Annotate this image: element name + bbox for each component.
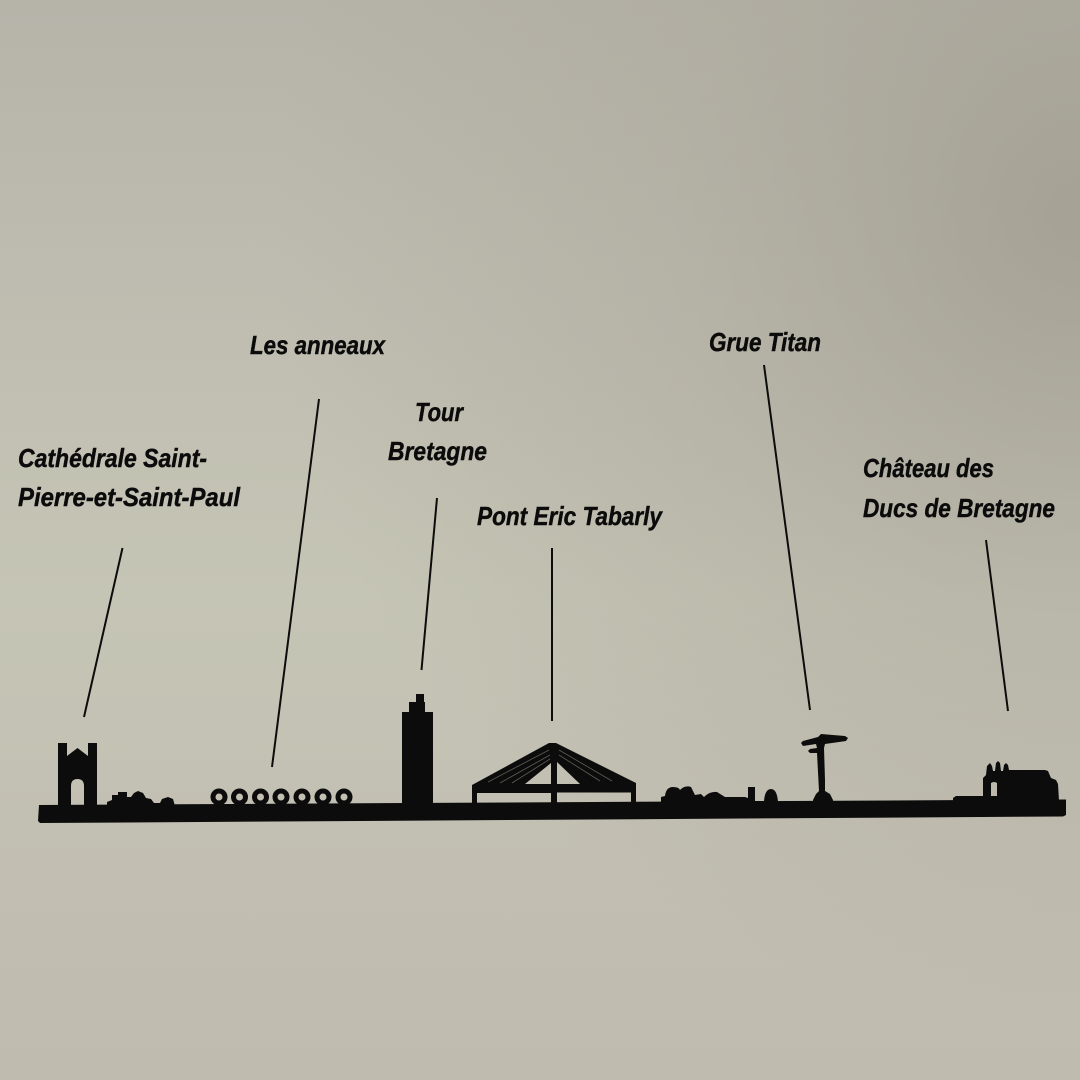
icon: château des Ducs de Bretagne [953, 761, 1059, 802]
icon: cathédrale Saint-Pierre-et-Saint-Paul [58, 743, 97, 806]
leader line: cathédrale [84, 548, 122, 717]
icon: tour Bretagne [402, 694, 433, 806]
label: château: Château des [863, 453, 994, 483]
label: grue Titan: Grue Titan [709, 327, 821, 357]
base bar [38, 800, 1066, 823]
label: château: Ducs de Bretagne [863, 493, 1055, 523]
icon: petits bâtiments gauche [107, 791, 175, 806]
icon: haubans du pont [488, 750, 612, 783]
label: cathédrale: Cathédrale Saint- [18, 443, 207, 473]
skyline silhouette [38, 694, 1066, 823]
label: les anneaux: Les anneaux [250, 330, 386, 360]
leader line: les anneaux [272, 399, 319, 767]
leader line: pont Eric Tabarly [551, 548, 553, 721]
label: cathédrale [18, 443, 241, 512]
leader line: château [986, 540, 1008, 711]
icon: grue Titan [801, 734, 848, 804]
leader line: tour Bretagne [422, 498, 437, 670]
leader line: grue Titan [764, 365, 810, 710]
label: tour Bretagne: Tour [415, 397, 465, 427]
label: pont Eric Tabarly: Pont Eric Tabarly [477, 501, 663, 531]
icon: pont Eric Tabarly [472, 743, 636, 804]
icon: bâtiments centre [661, 786, 778, 805]
label: château [863, 453, 1055, 523]
label: tour Bretagne [388, 397, 487, 466]
label: tour Bretagne: Bretagne [388, 436, 487, 466]
icon: les anneaux [213, 791, 350, 803]
label: cathédrale: Pierre-et-Saint-Paul [18, 482, 241, 512]
